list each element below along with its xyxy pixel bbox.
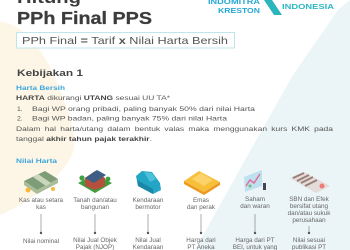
logo: Indomitra Kreston Indonesia: INDONESIA (282, 2, 335, 11)
column: SBN: perusahaan (292, 217, 326, 224)
column: kendaraan (133, 171, 164, 250)
heading: Kebijakan 1: Kebijakan 1 (17, 68, 84, 79)
column: emas: Harga dari (186, 237, 216, 244)
column: saham: Harga dari PT (235, 237, 275, 244)
column: emas (184, 171, 220, 250)
formula box (16, 32, 234, 48)
text block: Harta Bersih: HARTA dikurangi UTANG sesuai UU TA* (16, 95, 170, 102)
column: saham: dan waran (240, 203, 270, 210)
heading: Nilai Harta: Nilai Harta (16, 158, 57, 165)
background: cream shape (0, 22, 74, 215)
logo: Indomitra Kreston Indonesia (208, 0, 335, 15)
text block: Harta Bersih: Bagi WP orang pribadi, paling banyak 50% dari nilai Harta (32, 106, 255, 113)
text block: Harta Bersih: 2. (17, 116, 23, 122)
logo: Indomitra Kreston Indonesia: KRESTON (218, 6, 260, 15)
column: kas: Nilai nominal (23, 238, 59, 245)
column: emas: Emas (193, 197, 209, 204)
formula box: PPh Final = Tarif x Nilai Harta Bersih (22, 35, 228, 47)
background: light blue shape (195, 0, 350, 250)
column: tanah: Nilai Jual Objek (73, 237, 118, 244)
icon: car (136, 171, 161, 194)
title: PPh Final PPS (17, 8, 152, 28)
icon: bonds (290, 172, 330, 193)
column: tanah: bangunan (81, 204, 109, 211)
column: saham (233, 170, 278, 250)
column: SBN (288, 172, 331, 250)
icon: gold bars (184, 171, 220, 195)
icon: money (24, 171, 58, 194)
column: saham: Saham (245, 196, 265, 203)
column: kas: kas (36, 204, 46, 211)
text block: Harta Bersih: Bagi WP badan, paling banyak 75% dari nilai Harta (32, 116, 227, 122)
column: kendaraan: bermotor (135, 204, 161, 211)
text block: Harta Bersih: Dalam hal harta/utang dalam bentuk valas maka menggunakan kurs KMK pada (16, 126, 333, 133)
column: emas: dan perak (187, 204, 216, 211)
column: kendaraan: Kendaraan (133, 197, 164, 204)
column: SBN: Nilai sesuai (293, 237, 325, 244)
column: SBN: bersifat utang (290, 203, 329, 210)
column: kas (19, 171, 64, 245)
column: SBN: SBN dan Efek (289, 196, 330, 203)
icon: house (78, 170, 112, 193)
column: tanah (73, 170, 118, 250)
text block: Harta Bersih: tanggal akhir tahun pajak terakhir . (16, 136, 152, 143)
text block: Harta Bersih: Harta Bersih (16, 85, 65, 92)
column: tanah: Tanah dan/atau (73, 197, 117, 204)
column: kendaraan: Nilai Jual (135, 237, 161, 244)
title (17, 0, 152, 28)
text block: Harta Bersih (16, 85, 333, 143)
icon: stock chart (244, 170, 266, 192)
column: SBN: dan/atau sukuk (288, 210, 331, 217)
text block: Harta Bersih: 1. (17, 106, 23, 113)
column: kas: Kas atau setara (19, 197, 64, 204)
